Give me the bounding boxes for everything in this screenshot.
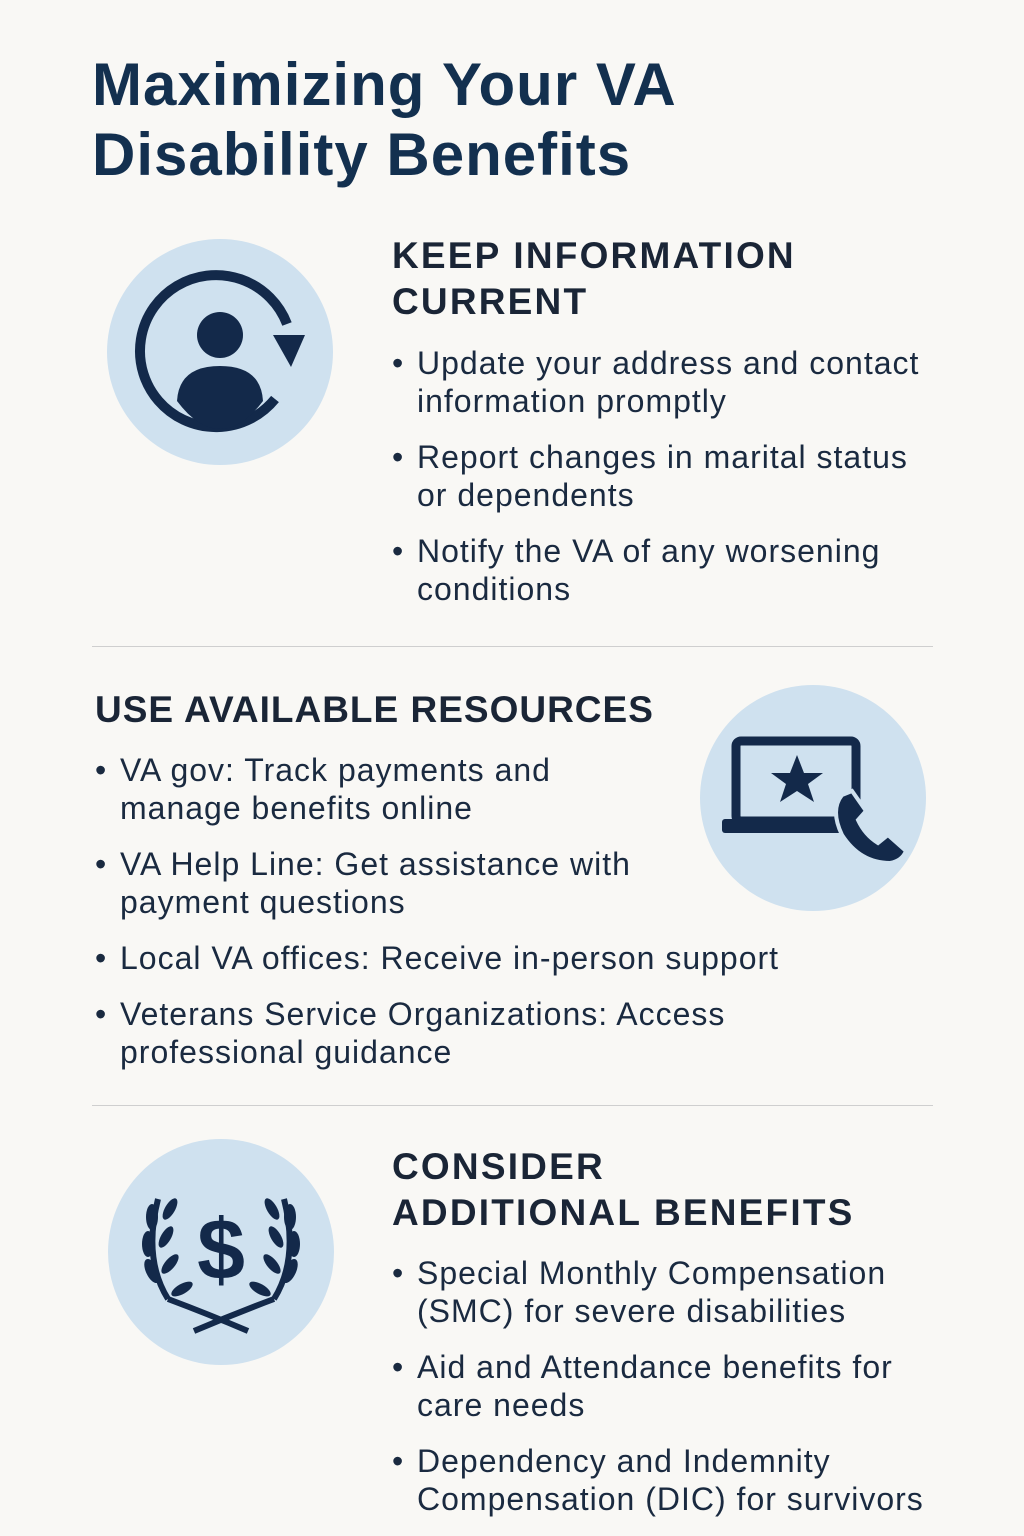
list: keep information current: Notify the VA of any worsening — [417, 533, 880, 569]
list: resources: VA Help Line: Get assistance with — [120, 846, 631, 882]
heading: consider additional benefits — [392, 1146, 855, 1233]
list: additional benefits: Aid and Attendance benefits for — [417, 1349, 893, 1385]
icon: laptop and phone — [700, 685, 926, 911]
list: resources: Veterans Service Organizations: Access — [120, 996, 725, 1032]
list: keep information current: information promptly — [417, 383, 727, 419]
list: resources: manage benefits online — [120, 790, 473, 826]
list: resources: VA gov: Track payments and — [120, 752, 551, 788]
heading: use available resources: USE AVAILABLE RESOURCES — [95, 689, 654, 730]
icon: dollar with laurel — [108, 1139, 334, 1365]
list: keep information current — [393, 345, 919, 607]
title: Maximizing Your VA — [92, 51, 677, 118]
title: Disability Benefits — [92, 121, 631, 188]
list: resources — [96, 752, 779, 1070]
icon: dollar with laurel: $ — [197, 1202, 245, 1298]
list: additional benefits: Special Monthly Compensation — [417, 1255, 886, 1291]
list: resources: professional guidance — [120, 1034, 452, 1070]
heading: consider additional benefits: ADDITIONAL BENEFITS — [392, 1192, 855, 1233]
heading: keep information current — [392, 235, 796, 322]
list: resources: Local VA offices: Receive in-person support — [120, 940, 779, 976]
list: keep information current: Update your address and contact — [417, 345, 919, 381]
heading: keep information current: KEEP INFORMATION — [392, 235, 796, 276]
list: additional benefits: Dependency and Indemnity — [417, 1443, 831, 1479]
list: additional benefits: (SMC) for severe disabilities — [417, 1293, 846, 1329]
heading: consider additional benefits: CONSIDER — [392, 1146, 605, 1187]
title — [92, 51, 677, 188]
list: additional benefits: care needs — [417, 1387, 585, 1423]
icon: person with refresh arrow — [107, 239, 333, 465]
list: additional benefits: Compensation (DIC) for survivors — [417, 1481, 924, 1517]
list: keep information current: conditions — [417, 571, 571, 607]
list: keep information current: or dependents — [417, 477, 635, 513]
heading: keep information current: CURRENT — [392, 281, 588, 322]
list: keep information current: Report changes in marital status — [417, 439, 908, 475]
list: additional benefits — [393, 1255, 924, 1517]
list: resources: payment questions — [120, 884, 406, 920]
